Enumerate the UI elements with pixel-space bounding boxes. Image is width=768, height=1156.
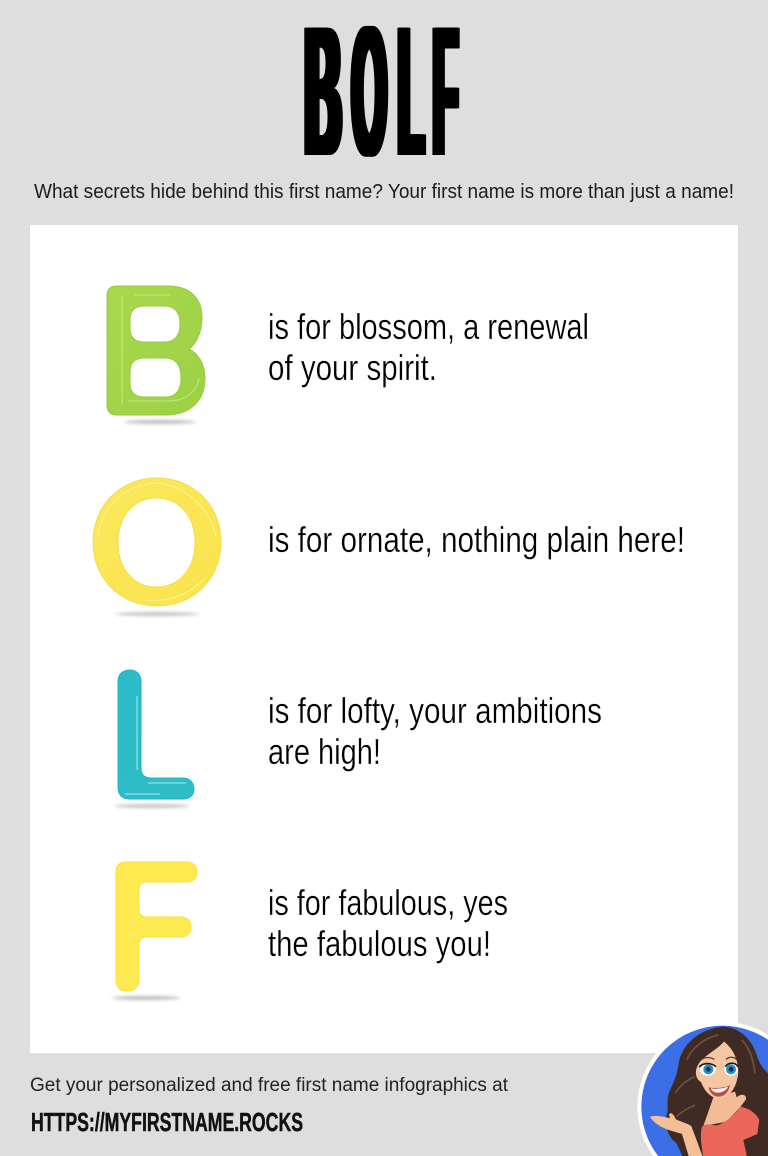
text: L line: are high! [268, 731, 381, 772]
neck and chest [703, 1092, 746, 1126]
text: O line: is for ornate, nothing plain here! [268, 519, 685, 560]
title [304, 0, 460, 195]
text: L line: is for lofty, your ambitions [268, 690, 602, 731]
text: F line: is for fabulous, yes [268, 882, 508, 923]
footer url: HTTPS://MYFIRSTNAME.ROCKS [31, 1107, 303, 1137]
hair [666, 1027, 768, 1156]
mouth [708, 1085, 730, 1097]
text: L line [268, 690, 602, 772]
shirt [701, 1107, 759, 1156]
panel: letters [30, 225, 738, 1053]
icon: letter O [93, 478, 221, 616]
subtitle: What secrets hide behind this first name? Your first name is more than just a name! [34, 181, 734, 203]
footer text: Get your personalized and free first name infographics at [30, 1075, 509, 1096]
icon: letter L [114, 670, 194, 808]
text: F line: the fabulous you! [268, 923, 491, 964]
text: B line: of your spirit. [268, 347, 437, 388]
icon: letter F [112, 862, 197, 1000]
icon: letter B [107, 286, 205, 424]
face [696, 1042, 738, 1098]
eyes [700, 1064, 716, 1076]
text: B line [268, 306, 589, 388]
avatar [637, 1022, 768, 1156]
text: F line [268, 882, 508, 964]
arm and hand [650, 1113, 703, 1156]
text: B line: is for blossom, a renewal [268, 306, 589, 347]
